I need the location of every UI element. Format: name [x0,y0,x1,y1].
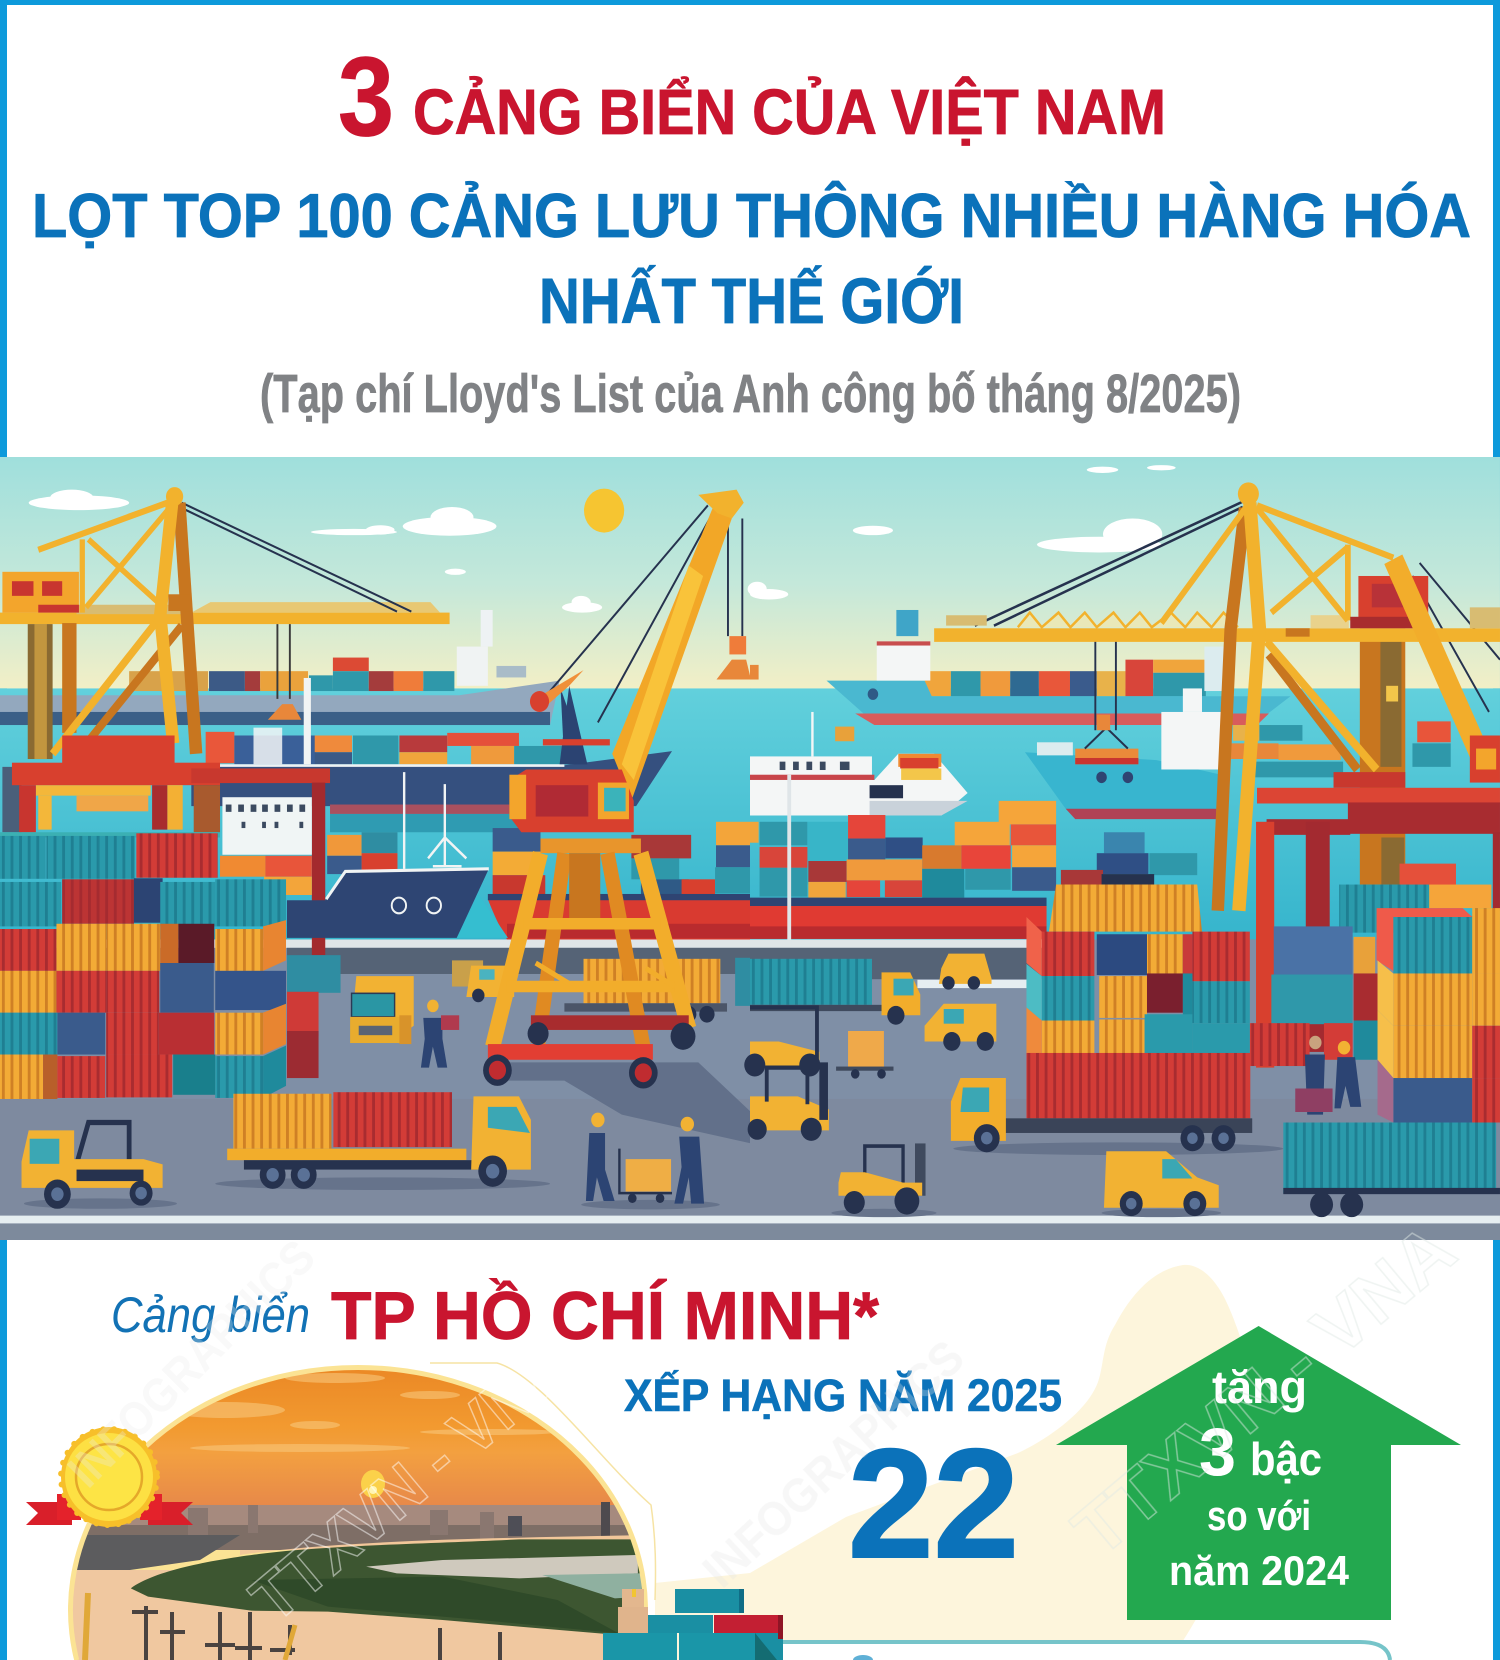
navy tug boat [287,772,508,938]
beige background blob [655,1265,1256,1660]
teal truck and vehicles behind [750,954,996,1051]
left gantry crane [0,487,450,759]
port illustration [0,456,1500,1240]
white ferry [750,712,968,816]
white area below panel edge [783,1643,1390,1660]
port name heading: TP HỒ CHÍ MINH* [331,1277,880,1354]
title line 1 [338,34,1166,159]
center container stack [1026,885,1378,1066]
big right gantry crane [934,482,1500,911]
watermarks [58,1209,1470,1636]
green up arrow with rank change: bậc [1250,1433,1322,1485]
title line 1: 3 [338,34,394,159]
front forklift [831,1143,937,1217]
green up arrow with rank change: 3 [1199,1414,1236,1490]
left forklift [22,1123,177,1209]
cargo boxes and containers [603,1589,783,1660]
watermarks: TTXVN - VNA [1059,1209,1470,1572]
teal info panel edge [783,1642,1390,1660]
crane ground shadow [493,1062,751,1143]
right container stack [1377,908,1500,1123]
port name heading [111,1277,880,1354]
green land in river [131,1539,646,1635]
red container truck [951,1053,1283,1155]
ships behind big crane [1231,721,1451,777]
red yard gantry [1256,772,1500,1068]
background grey cargo ship [0,610,560,725]
port name heading: Cảng biển [111,1287,310,1343]
title line 3: NHẤT THẾ GIỚI [539,265,964,337]
watermarks: INFOGRAPHICS [693,1331,975,1598]
teal trailer [1283,1123,1500,1217]
green up arrow with rank change: tăng [1212,1361,1307,1413]
light blue ship with hook load [1025,641,1224,819]
background containers at quay [327,822,752,898]
green up arrow with rank change: so với [1207,1492,1311,1539]
red hull right [750,775,1047,988]
left half of port scene [0,456,752,1240]
workers right [1295,1036,1361,1115]
front flatbed truck [215,1092,550,1190]
forklifts and cart [744,1007,893,1141]
green up arrow with rank change [1056,1326,1461,1620]
quay containers center [750,801,1197,898]
clouds and sun [29,489,624,613]
right clouds [748,465,1176,600]
green up arrow with rank change: năm 2024 [1169,1547,1350,1594]
left container stacks [0,832,319,1099]
two workers with trolley [581,1113,720,1209]
red freighter hull [488,899,751,939]
worker [421,1000,459,1068]
yellow van [1102,1151,1221,1217]
watermarks: TTXVN - VNA [236,1328,583,1636]
right background sky sea ground [750,456,1500,1240]
central mobile crane [483,490,751,1089]
red gantry frame and white cabin [2,735,330,955]
title line 1: CẢNG BIỂN CỦA VIỆT NAM [413,75,1166,148]
watermarks: INFOGRAPHICS [58,1230,326,1498]
thin gold outline [430,1363,656,1600]
right half of port scene [744,456,1500,1240]
medal icon [26,1427,193,1527]
ranking number: 22 [848,1417,1019,1590]
yard trucks behind mobile crane [287,955,751,1023]
small front-view truck [350,976,414,1044]
blue ship in background [827,610,1290,725]
port city sunset photo [60,1360,660,1660]
port cranes in photo [85,1593,500,1660]
navy container ship [191,678,672,832]
ranking label: XẾP HẠNG NĂM 2025 [624,1370,1062,1421]
